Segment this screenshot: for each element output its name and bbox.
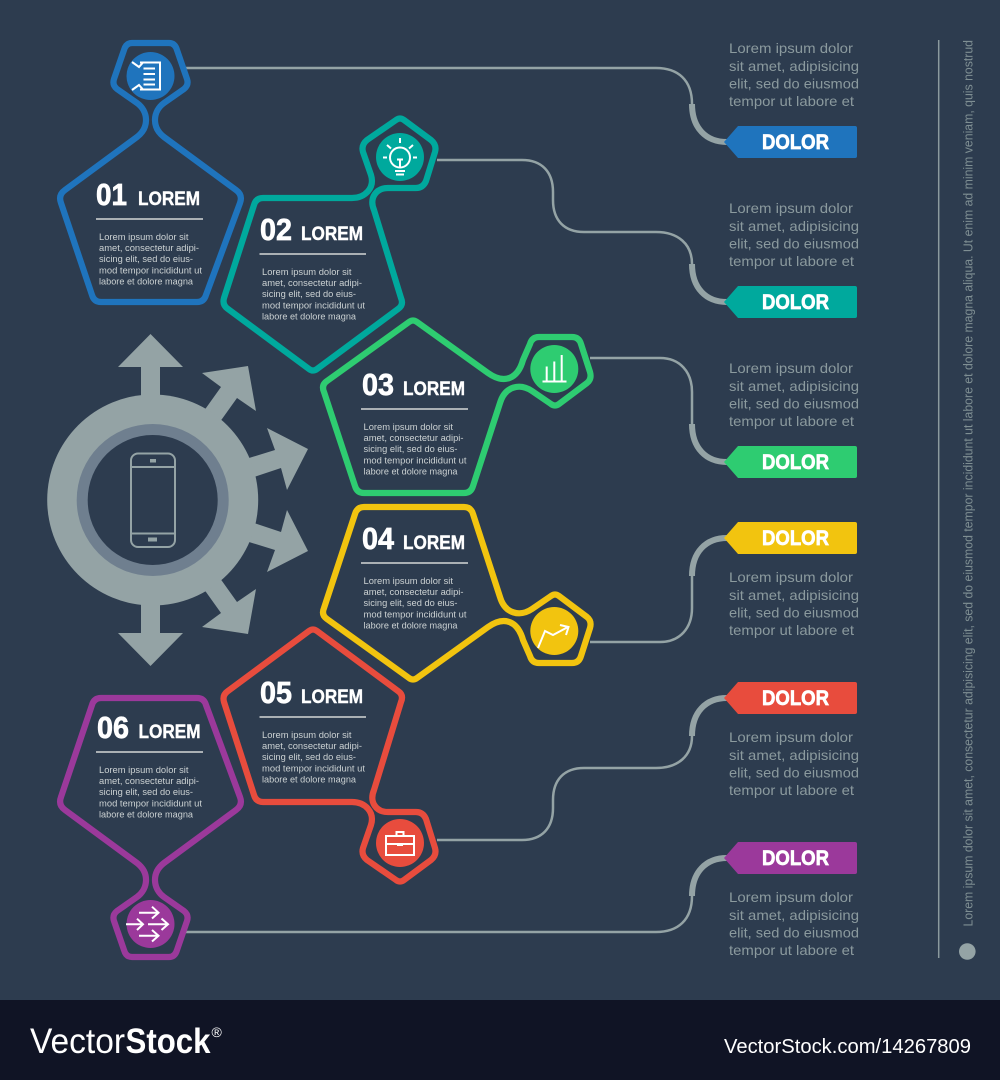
side text block 3: elit, sed do eiusmod bbox=[729, 396, 859, 412]
connector 5 bbox=[437, 698, 727, 840]
panel: 03 green bbox=[323, 320, 591, 493]
side text block 4 bbox=[729, 569, 859, 638]
tag: dolor purple: DOLOR bbox=[762, 847, 829, 870]
outline 02 bbox=[224, 118, 436, 370]
body text 04: Lorem ipsum dolor sit bbox=[364, 576, 454, 586]
connector 2 bbox=[437, 160, 727, 302]
tag: dolor green bbox=[724, 446, 857, 478]
connector 1 bbox=[186, 68, 727, 142]
side text block 6: tempor ut labore et bbox=[729, 942, 854, 958]
icon: trend arrow bbox=[530, 607, 578, 655]
heading 03: 03 bbox=[362, 367, 394, 402]
body text 04: mod tempor incididunt ut bbox=[364, 610, 467, 620]
tag: dolor green: DOLOR bbox=[762, 451, 829, 474]
body text 01: sicing elit, sed do eius- bbox=[99, 254, 193, 264]
side text block 6: sit amet, adipisicing bbox=[729, 907, 859, 923]
side text block 1: sit amet, adipisicing bbox=[729, 58, 859, 74]
heading 05 bbox=[260, 675, 366, 717]
body text 06: amet, consectetur adipi- bbox=[99, 776, 199, 786]
heading 06 bbox=[96, 710, 203, 752]
footer logo: ® bbox=[212, 1024, 222, 1040]
outline 03 bbox=[323, 320, 591, 493]
side dot bbox=[959, 943, 976, 960]
tag: dolor purple bbox=[724, 842, 857, 874]
body text 05: sicing elit, sed do eius- bbox=[262, 752, 356, 762]
tag: dolor red: DOLOR bbox=[762, 687, 829, 710]
body text 03: sicing elit, sed do eius- bbox=[364, 444, 458, 454]
heading 03: LOREM bbox=[403, 378, 465, 400]
footer id: VectorStock.com/14267809 bbox=[724, 1036, 971, 1058]
side text block 5: tempor ut labore et bbox=[729, 782, 854, 798]
body text 02: amet, consectetur adipi- bbox=[262, 278, 362, 288]
footer logo: Vector bbox=[30, 1022, 125, 1061]
heading 06: LOREM bbox=[138, 721, 200, 743]
body text 03 bbox=[364, 422, 467, 476]
side text block 6: Lorem ipsum dolor bbox=[729, 889, 853, 905]
panel: 06 purple bbox=[60, 698, 241, 957]
connector 3 bbox=[590, 358, 727, 462]
side text block 4: elit, sed do eiusmod bbox=[729, 604, 859, 620]
body text 01 bbox=[99, 232, 203, 286]
heading 02: 02 bbox=[260, 212, 292, 247]
side text block 2: Lorem ipsum dolor bbox=[729, 200, 853, 216]
panel: 02 teal bbox=[224, 118, 436, 370]
body text 04: labore et dolore magna bbox=[364, 620, 458, 630]
side text block 2 bbox=[729, 200, 859, 269]
icon: light bulb bbox=[376, 133, 424, 181]
side text block 3: Lorem ipsum dolor bbox=[729, 360, 853, 376]
heading 01 bbox=[96, 177, 203, 219]
tag: dolor red bbox=[724, 682, 857, 714]
footer logo bbox=[30, 1022, 222, 1061]
tag: dolor teal bbox=[724, 286, 857, 318]
heading 04: LOREM bbox=[403, 532, 465, 554]
body text 04: sicing elit, sed do eius- bbox=[364, 598, 458, 608]
body text 01: labore et dolore magna bbox=[99, 276, 193, 286]
side text block 4: Lorem ipsum dolor bbox=[729, 569, 853, 585]
heading 02 bbox=[260, 212, 366, 254]
side text block 1: elit, sed do eiusmod bbox=[729, 76, 859, 92]
body text 03: Lorem ipsum dolor sit bbox=[364, 422, 454, 432]
body text 02: sicing elit, sed do eius- bbox=[262, 289, 356, 299]
body text 01: amet, consectetur adipi- bbox=[99, 243, 199, 253]
side text block 5 bbox=[729, 729, 859, 798]
body text 02 bbox=[262, 267, 366, 322]
panel: 01 blue bbox=[60, 43, 241, 302]
panel: 05 red bbox=[224, 630, 436, 882]
icon: briefcase bbox=[376, 819, 424, 867]
body text 06: labore et dolore magna bbox=[99, 810, 193, 820]
side text block 5: sit amet, adipisicing bbox=[729, 747, 859, 763]
panel: 04 yellow bbox=[323, 507, 591, 680]
heading 06: 06 bbox=[97, 710, 129, 745]
tag: dolor teal: DOLOR bbox=[762, 291, 829, 314]
body text 05: amet, consectetur adipi- bbox=[262, 741, 362, 751]
outline 06 bbox=[60, 698, 241, 957]
body text 02: mod tempor incididunt ut bbox=[262, 300, 366, 310]
heading 05: 05 bbox=[260, 675, 292, 710]
heading 04: 04 bbox=[362, 521, 395, 556]
body text 01: Lorem ipsum dolor sit bbox=[99, 232, 189, 242]
heading 02: LOREM bbox=[301, 223, 363, 245]
body text 04: amet, consectetur adipi- bbox=[364, 587, 464, 597]
body text 05 bbox=[262, 730, 366, 784]
body text 05: labore et dolore magna bbox=[262, 774, 356, 784]
body text 01: mod tempor incididunt ut bbox=[99, 266, 203, 276]
side text block 4: sit amet, adipisicing bbox=[729, 587, 859, 603]
side text block 1: Lorem ipsum dolor bbox=[729, 40, 853, 56]
heading 01: LOREM bbox=[138, 188, 200, 210]
side text block 3: tempor ut labore et bbox=[729, 413, 854, 429]
tag: dolor blue bbox=[724, 126, 857, 158]
body text 06: Lorem ipsum dolor sit bbox=[99, 765, 189, 775]
outline 01 bbox=[60, 43, 241, 302]
side text block 3 bbox=[729, 360, 859, 429]
body text 02: Lorem ipsum dolor sit bbox=[262, 267, 352, 277]
side text block 5: Lorem ipsum dolor bbox=[729, 729, 853, 745]
side text block 1: tempor ut labore et bbox=[729, 93, 854, 109]
side text block 6: elit, sed do eiusmod bbox=[729, 924, 859, 940]
heading 05: LOREM bbox=[301, 686, 363, 708]
tag: dolor yellow: DOLOR bbox=[762, 527, 829, 550]
footer bar bbox=[0, 1000, 1000, 1080]
side text block 2: sit amet, adipisicing bbox=[729, 218, 859, 234]
side text block 4: tempor ut labore et bbox=[729, 622, 854, 638]
side text block 6 bbox=[729, 889, 859, 958]
tag: dolor blue: DOLOR bbox=[762, 131, 829, 154]
icon: crossing arrows bbox=[126, 900, 174, 948]
vertical side text: Lorem ipsum dolor sit amet, consectetur adipisicing elit, sed do eiusmod tempor incididunt ut labore et dolore magna aliqua. Ut enim ad minim veniam, quis nostrud bbox=[962, 40, 976, 926]
heading 03 bbox=[361, 367, 468, 409]
side text block 3: sit amet, adipisicing bbox=[729, 378, 859, 394]
side text block 2: tempor ut labore et bbox=[729, 253, 854, 269]
body text 03: labore et dolore magna bbox=[364, 466, 458, 476]
connector 4 bbox=[590, 538, 727, 642]
body text 03: amet, consectetur adipi- bbox=[364, 433, 464, 443]
heading 04 bbox=[361, 521, 468, 563]
body text 02: labore et dolore magna bbox=[262, 312, 356, 322]
body text 06: mod tempor incididunt ut bbox=[99, 798, 203, 808]
body text 04 bbox=[364, 576, 467, 630]
side text block 2: elit, sed do eiusmod bbox=[729, 236, 859, 252]
side text block 1 bbox=[729, 40, 859, 109]
connector 6 bbox=[186, 858, 727, 932]
tag: dolor yellow bbox=[724, 522, 857, 554]
body text 05: mod tempor incididunt ut bbox=[262, 764, 366, 774]
outline 04 bbox=[323, 507, 591, 680]
heading 01: 01 bbox=[96, 177, 127, 212]
footer logo: Stock bbox=[126, 1022, 211, 1061]
icon: bar chart bbox=[530, 345, 578, 393]
body text 03: mod tempor incididunt ut bbox=[364, 456, 467, 466]
central phone gear icon bbox=[47, 334, 308, 666]
body text 06 bbox=[99, 765, 203, 820]
body text 06: sicing elit, sed do eius- bbox=[99, 787, 193, 797]
outline 05 bbox=[224, 630, 436, 882]
body text 05: Lorem ipsum dolor sit bbox=[262, 730, 352, 740]
side text block 5: elit, sed do eiusmod bbox=[729, 764, 859, 780]
icon: document bbox=[126, 52, 174, 100]
